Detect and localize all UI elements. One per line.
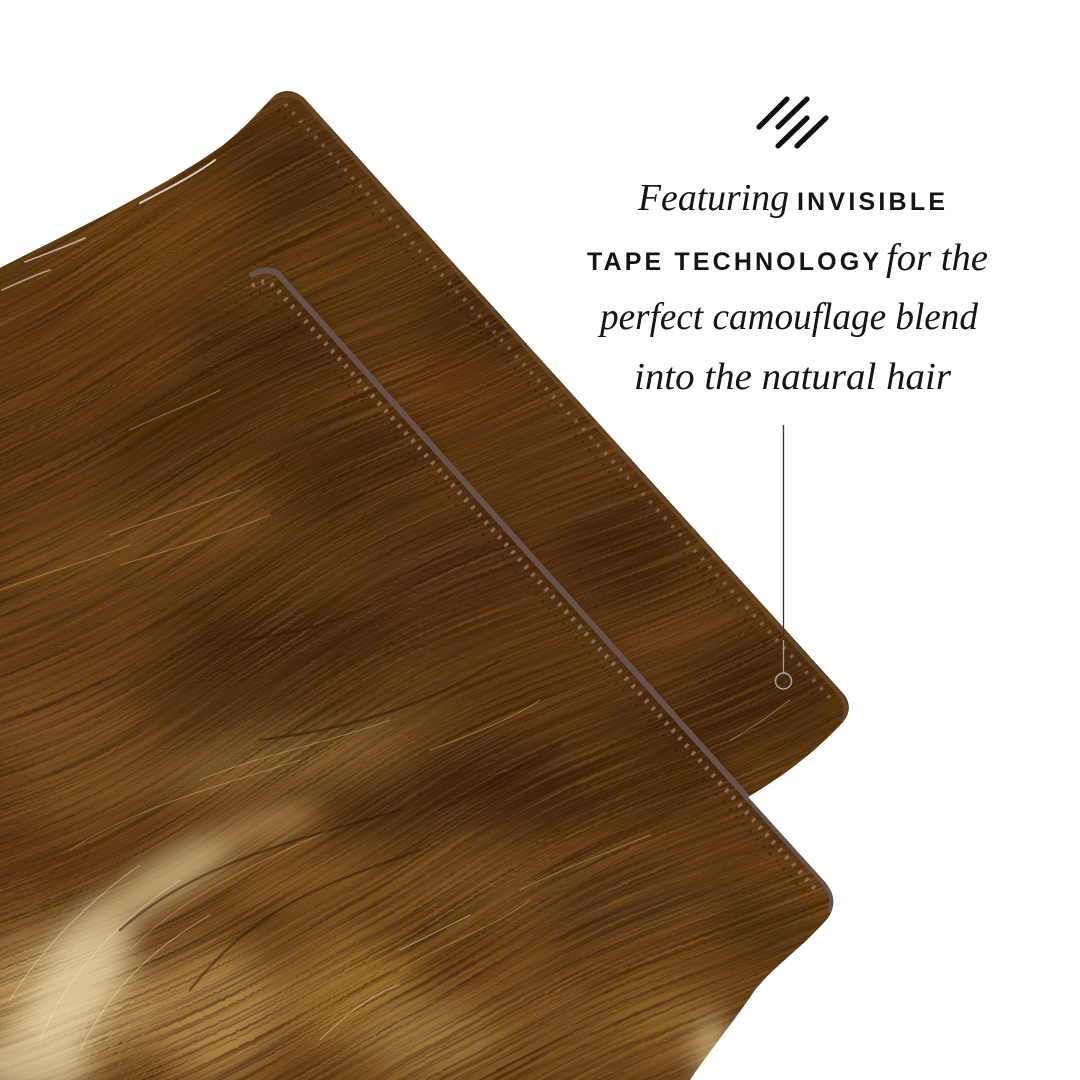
blonde ends overlay	[0, 790, 736, 1080]
callout text: Featuring	[637, 177, 789, 219]
overall depth shade	[0, 91, 849, 992]
icon: diagonal lines	[759, 99, 826, 146]
lower weft tape edge	[250, 270, 832, 912]
hair wefts photo	[0, 60, 900, 1080]
upper weft tape edge	[262, 95, 846, 722]
callout text: for the	[886, 237, 988, 279]
hair strand texture	[0, 60, 900, 1080]
colour regions of the ombre hair	[0, 60, 900, 1080]
callout text: INVISIBLE	[797, 188, 945, 216]
gloss highlights on upper strand	[2, 160, 215, 290]
individual strands	[0, 325, 790, 1050]
callout text: TAPE TECHNOLOGY	[587, 248, 879, 276]
callout leader line with marker	[776, 425, 792, 689]
callout text: perfect camouflage blend	[597, 296, 979, 338]
shadow under lower weft tape	[274, 278, 800, 860]
callout text: into the natural hair	[634, 356, 951, 398]
callout text	[587, 177, 988, 398]
